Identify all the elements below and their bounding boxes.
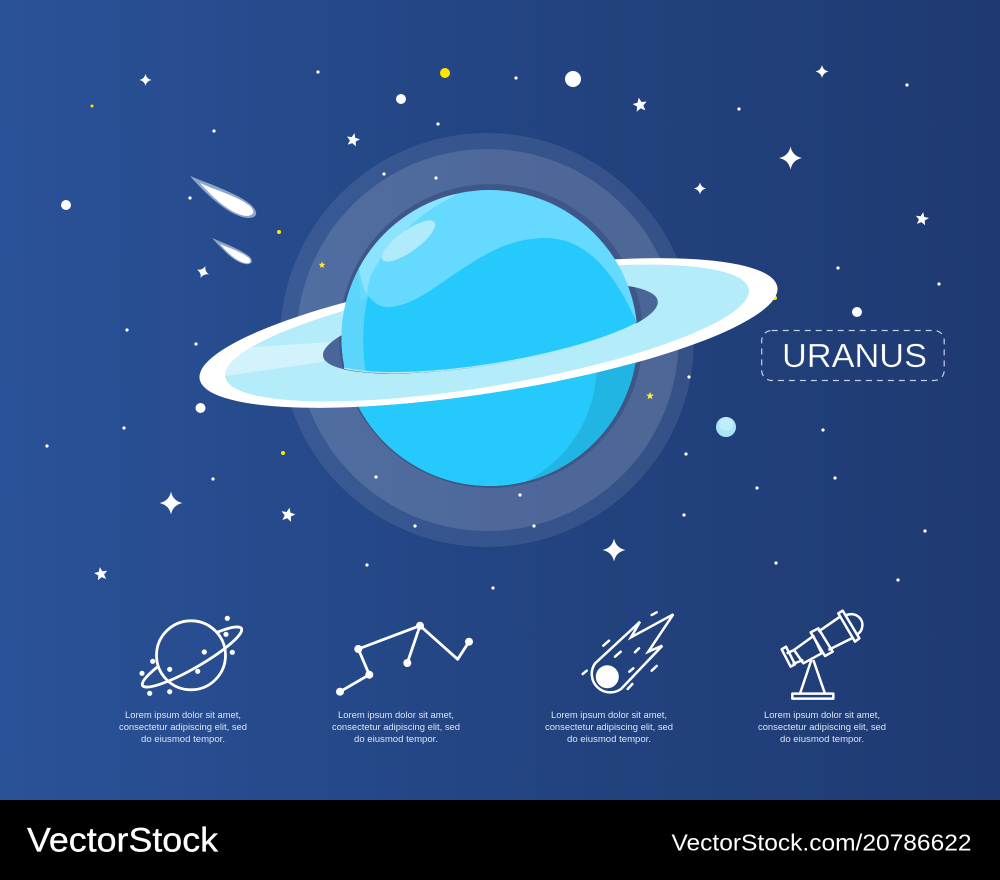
text: telescope caption: consectetur adipiscing elit, sed [758, 721, 886, 732]
icon: constellation [336, 622, 473, 696]
shaded limb [525, 362, 636, 482]
planet body [340, 180, 645, 490]
icon: comet [583, 612, 673, 692]
star field [45, 65, 941, 590]
text: comet caption: do eiusmod tempor. [567, 733, 651, 744]
label: URANUS: URANUS [782, 338, 927, 375]
ring edge over planet [344, 324, 636, 373]
text: constellation caption: consectetur adipiscing elit, sed [332, 721, 460, 732]
text: constellation caption [332, 709, 460, 744]
glare [382, 220, 436, 262]
text: comet caption: consectetur adipiscing elit, sed [545, 721, 673, 732]
background dots over halo [374, 172, 691, 528]
text: planet caption: Lorem ipsum dolor sit amet, [125, 709, 241, 720]
label: URANUS [762, 330, 944, 380]
planet shadow [339, 184, 643, 488]
text: telescope caption: do eiusmod tempor. [780, 733, 864, 744]
atmosphere halo inner [296, 149, 678, 531]
text: telescope caption: Lorem ipsum dolor sit amet, [764, 709, 880, 720]
comet: small [212, 238, 252, 264]
yellow stars [90, 68, 777, 455]
text: planet caption [119, 709, 247, 744]
text: constellation caption: do eiusmod tempor. [354, 733, 438, 744]
planet: Uranus with ring [190, 133, 787, 547]
footer bar [0, 800, 1000, 880]
comet: large [190, 176, 256, 218]
footer logo: VectorStock [27, 822, 219, 860]
moon [716, 417, 736, 437]
icon: ringed planet [139, 616, 242, 696]
footer url: VectorStock.com/20786622 [672, 830, 972, 856]
icon: telescope [782, 611, 862, 699]
ring [200, 258, 778, 408]
text: comet caption [545, 709, 673, 744]
atmosphere halo outer [280, 133, 694, 547]
text: comet caption: Lorem ipsum dolor sit amet, [551, 709, 667, 720]
text: constellation caption: Lorem ipsum dolor sit amet, [338, 709, 454, 720]
text: planet caption: do eiusmod tempor. [141, 733, 225, 744]
text: planet caption: consectetur adipiscing elit, sed [119, 721, 247, 732]
text: telescope caption [758, 709, 886, 744]
